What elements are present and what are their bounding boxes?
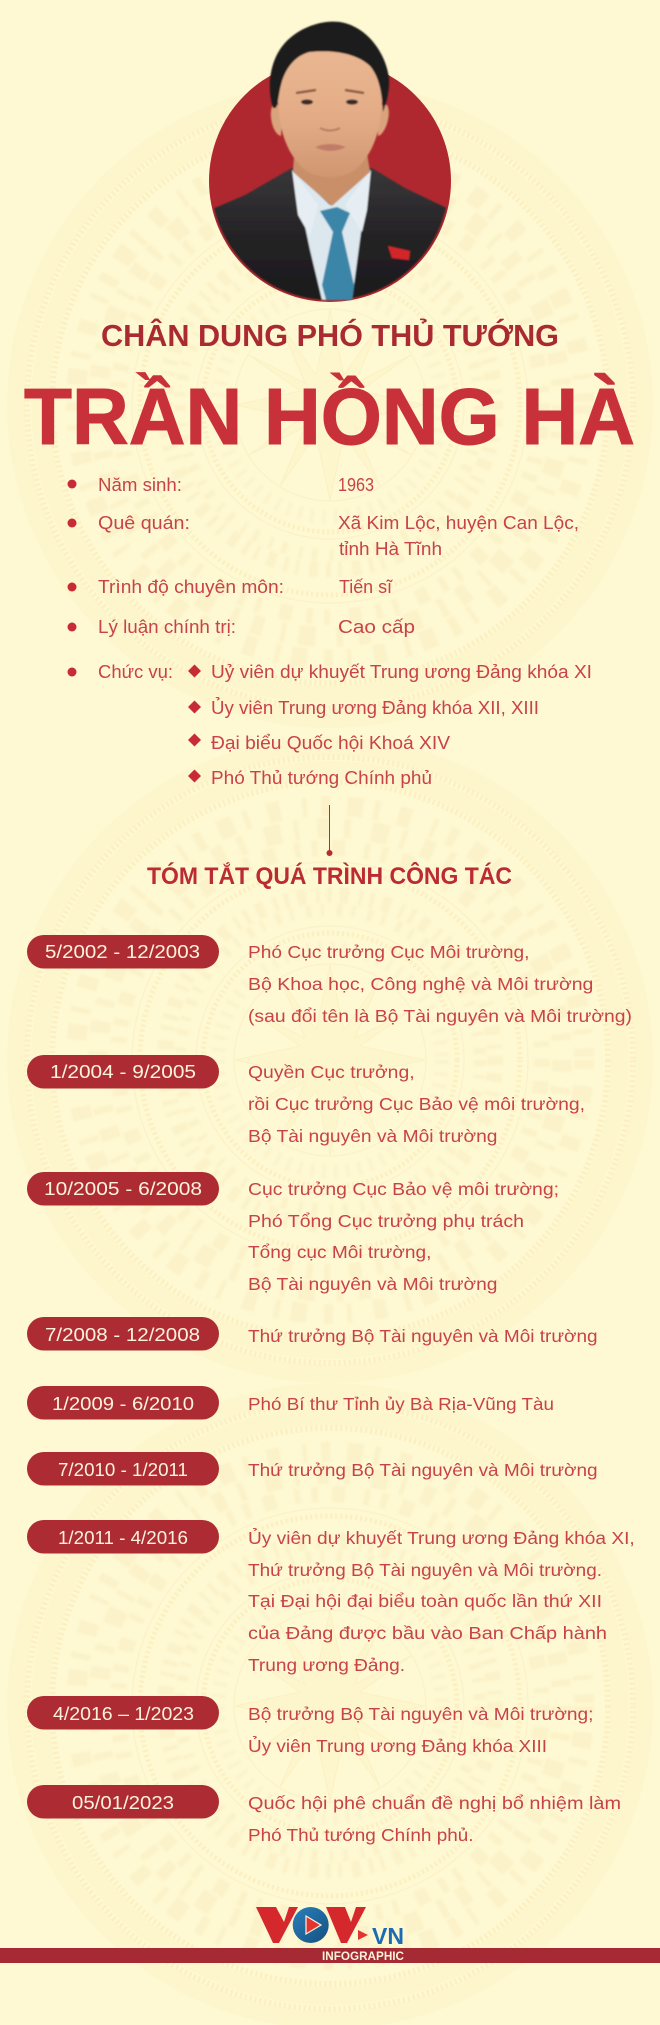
- value: qualification: Tiến sĩ: [339, 577, 393, 597]
- value: hometown: Xã Kim Lộc, huyện Can Lộc,: [338, 513, 579, 533]
- entry: 1/2009 - 6/2010: 1/2009 - 6/2010: [52, 1393, 194, 1414]
- logo: VOV.VN: [256, 1907, 404, 1949]
- entry: 10/2005 - 6/2008: Bộ Tài nguyên và Môi trường: [248, 1274, 498, 1294]
- label: political theory: Lý luận chính trị:: [98, 617, 236, 637]
- label: qualification: Trình độ chuyên môn:: [98, 577, 284, 597]
- entry: 1/2011 - 4/2016: [27, 1520, 635, 1675]
- bullet: birth year: [68, 480, 76, 488]
- value: political theory: Cao cấp: [338, 617, 415, 637]
- entry: 7/2010 - 1/2011: [27, 1452, 598, 1486]
- entry: 1/2004 - 9/2005: 1/2004 - 9/2005: [50, 1061, 196, 1082]
- icon: diamond 1: [188, 664, 201, 678]
- entry: 1/2004 - 9/2005: rồi Cục trưởng Cục Bảo vệ môi trường,: [248, 1094, 585, 1114]
- entry: 5/2002 - 12/2003: 5/2002 - 12/2003: [45, 941, 200, 962]
- entry: 10/2005 - 6/2008: 10/2005 - 6/2008: [44, 1178, 202, 1199]
- heading: career summary: TÓM TẮT QUÁ TRÌNH CÔNG TÁC: [147, 862, 512, 890]
- entry: 4/2016 – 1/2023: Ủy viên Trung ương Đảng khóa XIII: [248, 1735, 547, 1756]
- title: subtitle: CHÂN DUNG PHÓ THỦ TƯỚNG: [101, 317, 559, 353]
- entry: 5/2002 - 12/2003: [27, 935, 632, 1026]
- icon: diamond 3: [188, 734, 201, 746]
- entry: 4/2016 – 1/2023: 4/2016 – 1/2023: [53, 1703, 194, 1724]
- bullet: political theory: [68, 622, 76, 632]
- label: positions: Chức vụ:: [98, 662, 173, 682]
- entry: 5/2002 - 12/2003: Phó Cục trưởng Cục Môi trường,: [248, 942, 530, 962]
- entry: 05/01/2023: Quốc hội phê chuẩn đề nghị bổ nhiệm làm: [248, 1793, 621, 1813]
- icon: diamond 4: [188, 770, 201, 782]
- entry: 7/2008 - 12/2008: Thứ trưởng Bộ Tài nguyên và Môi trường: [248, 1326, 598, 1346]
- entry: 10/2005 - 6/2008: Tổng cục Môi trường,: [248, 1242, 431, 1262]
- entry: 1/2009 - 6/2010: Phó Bí thư Tỉnh ủy Bà Rịa-Vũng Tàu: [248, 1394, 554, 1414]
- bullet: hometown: [68, 518, 76, 528]
- title: name: TRẦN HỒNG HÀ: [24, 372, 635, 461]
- value: hometown: tỉnh Hà Tĩnh: [339, 539, 442, 559]
- personal information list: [68, 475, 592, 788]
- footer band: INFOGRAPHIC: [322, 1949, 404, 1963]
- position 1: Uỷ viên dự khuyết Trung ương Đảng khóa XI: [211, 662, 592, 682]
- entry: 1/2011 - 4/2016: Ủy viên dự khuyết Trung ương Đảng khóa XI,: [248, 1527, 635, 1548]
- icon: diamond 2: [188, 700, 201, 714]
- bullet: qualification: [68, 582, 76, 592]
- entry: 10/2005 - 6/2008: Phó Tổng Cục trưởng phụ trách: [248, 1211, 524, 1231]
- career timeline: [27, 935, 635, 1845]
- entry: 7/2008 - 12/2008: 7/2008 - 12/2008: [45, 1324, 200, 1345]
- entry: 7/2010 - 1/2011: 7/2010 - 1/2011: [58, 1459, 188, 1480]
- label: hometown: Quê quán:: [98, 513, 190, 533]
- connector line with dot: [326, 805, 332, 856]
- entry: 05/01/2023: [27, 1785, 621, 1845]
- entry: 1/2004 - 9/2005: [27, 1055, 585, 1146]
- entry: 1/2011 - 4/2016: của Đảng được bầu vào Ban Chấp hành: [248, 1623, 607, 1643]
- entry: 5/2002 - 12/2003: (sau đổi tên là Bộ Tài nguyên và Môi trường): [248, 1006, 632, 1026]
- portrait: Trần Hồng Hà on red circle: [205, 22, 455, 310]
- value: hometown: [338, 513, 579, 559]
- entry: 1/2011 - 4/2016: Tại Đại hội đại biểu toàn quốc lần thứ XII: [248, 1591, 602, 1611]
- entry: 10/2005 - 6/2008: Cục trưởng Cục Bảo vệ môi trường;: [248, 1179, 559, 1199]
- position 4: Phó Thủ tướng Chính phủ: [211, 768, 432, 788]
- entry: 1/2004 - 9/2005: Bộ Tài nguyên và Môi trường: [248, 1126, 498, 1146]
- bullet: positions: [68, 668, 76, 676]
- entry: 7/2010 - 1/2011: Thứ trưởng Bộ Tài nguyên và Môi trường: [248, 1460, 598, 1480]
- value: birth year: 1963: [338, 475, 374, 495]
- label: birth year: Năm sinh:: [98, 475, 182, 495]
- entry: 10/2005 - 6/2008: [27, 1172, 559, 1294]
- entry: 1/2004 - 9/2005: Quyền Cục trưởng,: [248, 1062, 415, 1082]
- entry: 05/01/2023: 05/01/2023: [72, 1792, 174, 1813]
- entry: 1/2011 - 4/2016: Thứ trưởng Bộ Tài nguyên và Môi trường.: [248, 1560, 602, 1580]
- entry: 7/2008 - 12/2008: [27, 1317, 598, 1350]
- entry: 1/2011 - 4/2016: 1/2011 - 4/2016: [58, 1527, 188, 1548]
- footer band: [0, 1948, 660, 1963]
- entry: 05/01/2023: Phó Thủ tướng Chính phủ.: [248, 1825, 474, 1845]
- position 2: Ủy viên Trung ương Đảng khóa XII, XIII: [211, 697, 539, 718]
- position 3: Đại biểu Quốc hội Khoá XIV: [211, 733, 450, 753]
- entry: 5/2002 - 12/2003: Bộ Khoa học, Công nghệ và Môi trường: [248, 974, 593, 994]
- entry: 4/2016 – 1/2023: Bộ trưởng Bộ Tài nguyên và Môi trường;: [248, 1704, 593, 1724]
- entry: 4/2016 – 1/2023: [27, 1696, 593, 1756]
- entry: 1/2009 - 6/2010: [27, 1386, 554, 1420]
- logo: VOV.VN: VN: [372, 1923, 404, 1949]
- entry: 1/2011 - 4/2016: Trung ương Đảng.: [248, 1655, 405, 1675]
